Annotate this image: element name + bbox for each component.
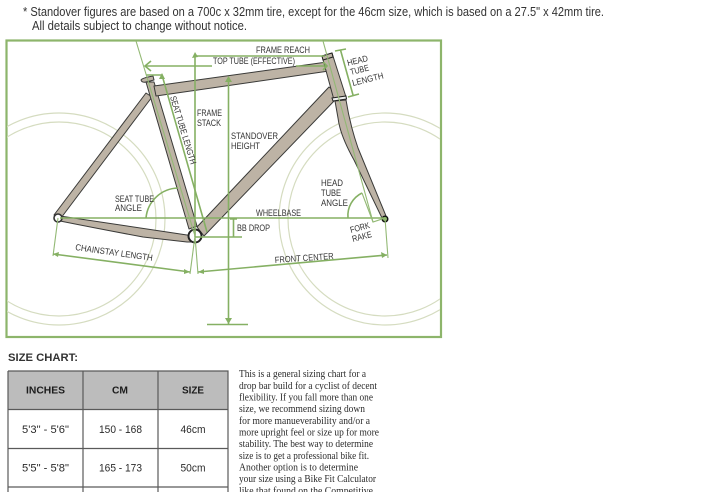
- diagram labels: STACK: [197, 118, 221, 128]
- sizing note paragraph: stability. The best way to determine: [239, 439, 373, 450]
- diagram labels: FORK: [349, 220, 371, 235]
- measurement lines: [53, 41, 388, 324]
- sizing note paragraph: Another option is to determine: [239, 462, 358, 474]
- panel: bike geometry diagram: [0, 40, 491, 337]
- table grid: [8, 371, 228, 492]
- bike frame and fork: [54, 53, 388, 242]
- row: 50cm: [22, 462, 206, 474]
- diagram labels: LENGTH: [351, 70, 385, 88]
- diagram labels: TOP TUBE (EFFECTIVE): [213, 56, 295, 66]
- diagram labels: FRONT CENTER: [274, 251, 334, 265]
- diagram labels: TUBE: [349, 63, 370, 77]
- diagram labels: SEAT TUBE: [115, 194, 154, 204]
- diagram labels: FRAME REACH: [256, 45, 310, 55]
- row: 46cm: 150 - 168: [99, 424, 142, 436]
- diagram labels: TUBE: [321, 188, 341, 198]
- footnote text: [23, 5, 604, 33]
- diagram labels: STANDOVER: [231, 131, 278, 141]
- diagram labels: HEAD: [321, 178, 343, 188]
- row: 46cm: [22, 424, 206, 436]
- header labels: CM: [112, 384, 128, 396]
- sizing note paragraph: drop bar build for a cyclist of decent: [239, 381, 377, 392]
- sizing note paragraph: flexibility. If you fall more than one: [239, 392, 373, 404]
- diagram labels: FRAME: [197, 108, 222, 118]
- sizing note paragraph: [239, 369, 379, 492]
- diagram labels: CHAINSTAY LENGTH: [75, 242, 153, 263]
- diagram labels: RAKE: [351, 229, 373, 244]
- sizing note paragraph: more upright feel or size up for more: [239, 428, 379, 438]
- front dropout: [382, 216, 388, 222]
- sizing note paragraph: size, we recommend sizing down: [239, 404, 366, 415]
- header labels: [26, 384, 204, 396]
- row: 50cm: 165 - 173: [99, 462, 142, 474]
- row: 46cm: 5'3" - 5'6": [22, 424, 69, 436]
- diagram labels: HEIGHT: [231, 141, 261, 151]
- size chart table: [8, 371, 228, 492]
- footnote text: All details subject to change without notice.: [32, 19, 247, 33]
- diagram labels: [75, 45, 385, 265]
- diagram labels: SEAT TUBE LENGTH: [168, 95, 198, 165]
- row: 50cm: 5'5" - 5'8": [22, 462, 69, 474]
- diagram labels: HEAD: [346, 53, 369, 68]
- table header: [8, 371, 228, 409]
- sizing note paragraph: your size using a Bike Fit Calculator: [239, 474, 376, 485]
- diagram labels: BB DROP: [237, 223, 270, 233]
- row: 46cm: 46cm: [180, 424, 206, 436]
- diagram labels: ANGLE: [321, 198, 348, 208]
- diagram labels: WHEELBASE: [256, 208, 301, 218]
- sizing note paragraph: for more manueverability and/or a: [239, 416, 370, 427]
- rear dropout: [54, 214, 62, 222]
- heading: size chart: SIZE CHART:: [8, 352, 78, 364]
- bottom bracket: [188, 230, 202, 242]
- footnote text: * Standover figures are based on a 700c x 32mm tire, except for the 46cm size, which is based on a 27.5" x 42mm tire.: [23, 5, 604, 19]
- header labels: INCHES: [26, 384, 65, 396]
- sizing note paragraph: size is to get a professional bike fit.: [239, 451, 369, 462]
- panel border: [6, 40, 441, 337]
- header labels: SIZE: [182, 384, 204, 396]
- wheels: [7, 112, 440, 326]
- diagram labels: ANGLE: [115, 203, 142, 213]
- row: 50cm: 50cm: [180, 462, 206, 474]
- sizing note paragraph: This is a general sizing chart for a: [239, 369, 366, 380]
